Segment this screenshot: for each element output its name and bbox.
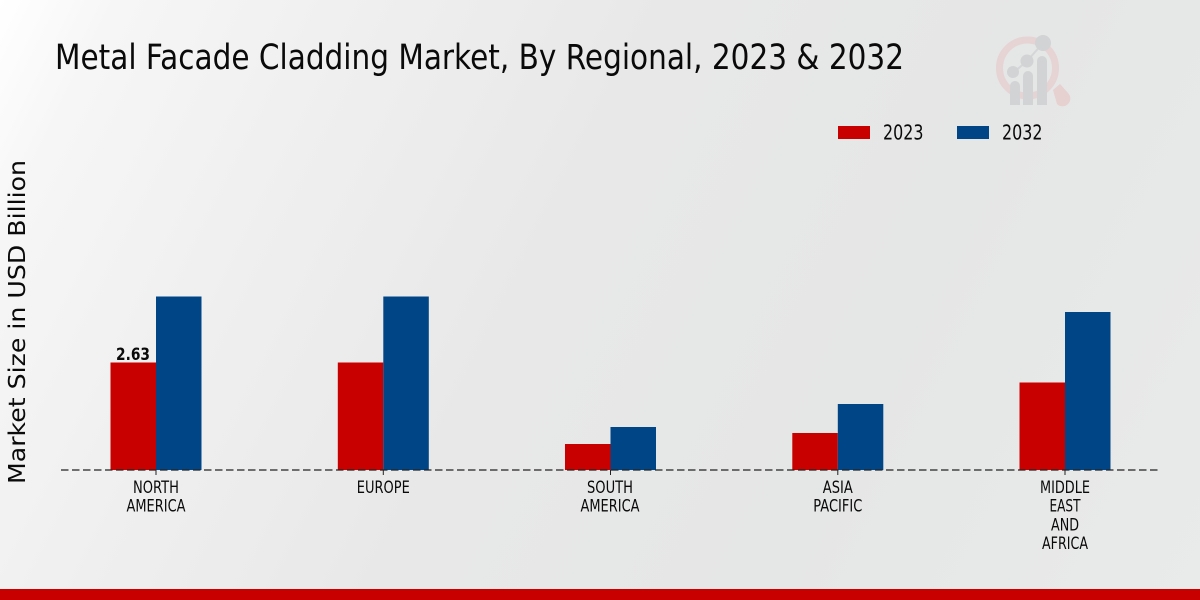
x label: South America — [580, 478, 640, 516]
x label: Asia Pacific — [813, 478, 862, 516]
title: Metal Facade Cladding Market, By Regional, 2023 & 2032 — [55, 38, 904, 78]
x label: Middle East and Africa: AND — [1051, 516, 1079, 534]
x label: Asia Pacific: ASIA — [823, 478, 853, 497]
x label: North America: NORTH — [133, 478, 179, 497]
legend swatch: 2023 — [838, 126, 870, 139]
x label: Europe: EUROPE — [357, 478, 410, 497]
bottom bar — [0, 589, 1200, 600]
x label: Middle East and Africa: MIDDLE — [1040, 478, 1090, 497]
x label: South America: AMERICA — [580, 496, 640, 516]
y-axis label: Market Size in USD Billion — [3, 160, 31, 484]
legend label: 2032: 2032 — [1002, 120, 1042, 144]
icon: watermark logo — [1000, 35, 1070, 106]
bars: Europe — [338, 296, 429, 470]
bars: South America — [565, 427, 656, 470]
x label: South America: SOUTH — [587, 478, 633, 497]
bar chart — [61, 296, 1160, 553]
bars: Asia Pacific — [792, 404, 883, 470]
x label: North America — [126, 478, 186, 516]
x label: Middle East and Africa: AFRICA — [1042, 534, 1089, 553]
bars: North America — [110, 296, 202, 470]
data label: 2.63: 2.63 — [116, 345, 150, 364]
x label: Asia Pacific: PACIFIC — [813, 496, 862, 516]
x label: Middle East and Africa: EAST — [1050, 496, 1081, 516]
x label: North America: AMERICA — [126, 496, 186, 516]
legend swatch: 2032 — [957, 126, 989, 139]
legend label: 2023: 2023 — [883, 120, 924, 144]
bars: Middle East and Africa — [1020, 312, 1110, 470]
x label: Middle East and Africa — [1040, 478, 1090, 553]
legend — [838, 120, 1042, 144]
